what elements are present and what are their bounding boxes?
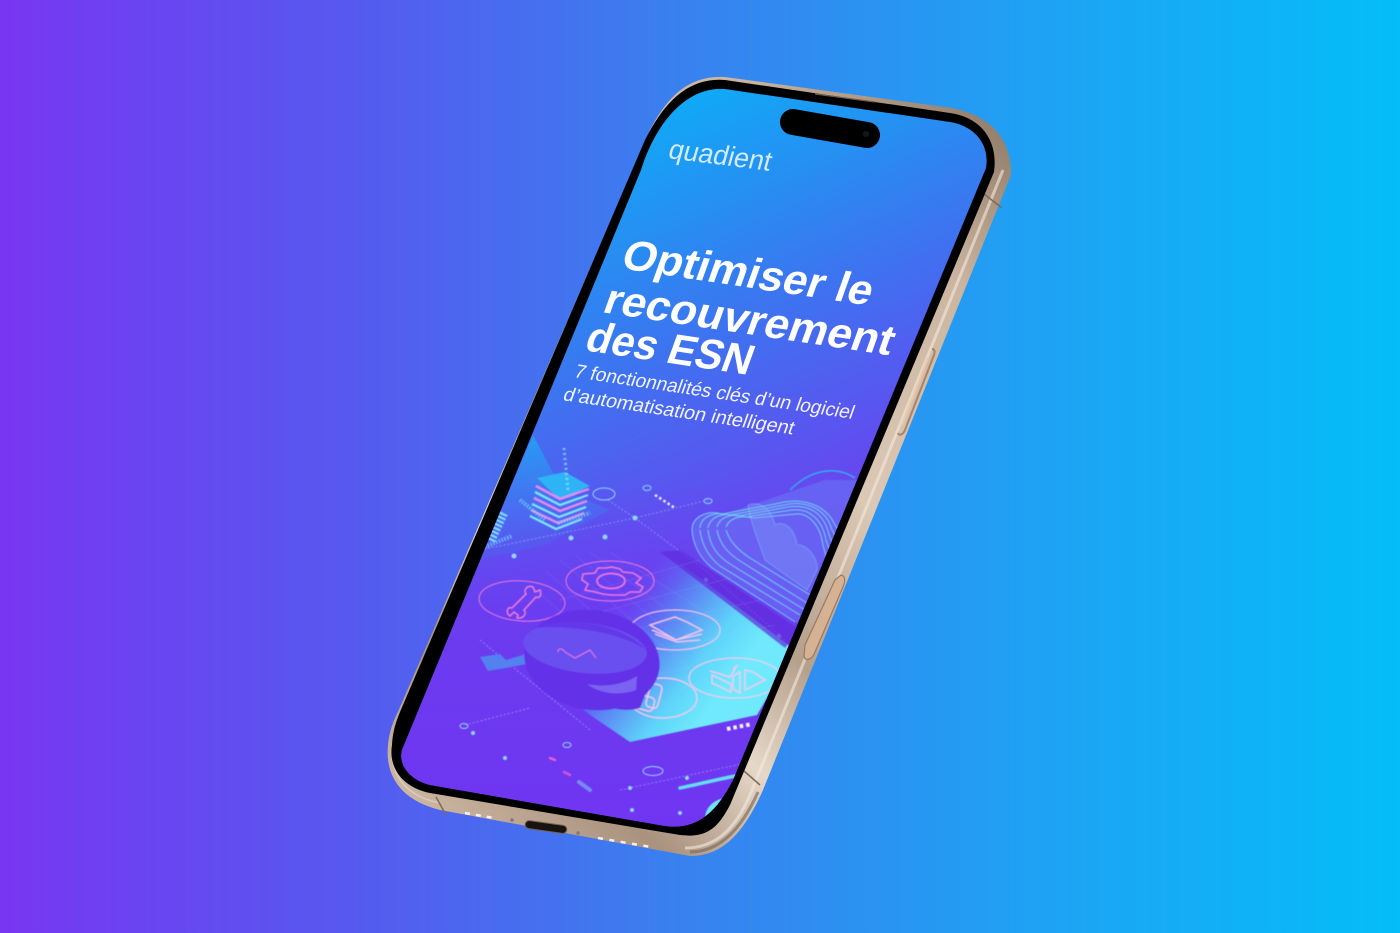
cloud outlines: [692, 471, 860, 640]
icon: chain link circle: [629, 678, 697, 718]
grid on panel: [538, 552, 775, 702]
title line 3: des ESN: [580, 313, 761, 384]
magnifier ring: [524, 610, 660, 711]
magnifier lens: [523, 623, 647, 674]
lens highlight band: [587, 676, 637, 693]
magnifier lower body: [615, 694, 646, 710]
dynamic island: [793, 122, 867, 135]
server stacks: [482, 448, 590, 548]
camera dot: [863, 131, 869, 137]
logo: quadient: quadient: [665, 134, 776, 177]
charging port: [525, 820, 567, 834]
isometric illustration: [460, 435, 860, 830]
subtitle line 2: d’automatisation intelligent: [560, 385, 798, 439]
icon: gear circle: [566, 561, 654, 601]
dotted row: [655, 495, 675, 508]
title line 2: recouvrement: [598, 275, 902, 365]
icon: wrench circle: [478, 578, 566, 624]
black bezel: [391, 80, 995, 836]
screen: [401, 88, 987, 827]
earpiece slit: [815, 94, 875, 102]
phone body: [380, 70, 1020, 856]
light beams: [478, 435, 610, 560]
metal frame: [388, 77, 1011, 856]
icon: bar chart circle: [689, 658, 781, 698]
magnifier handle: [480, 654, 527, 671]
frame highlights and antenna bands: [392, 170, 1003, 852]
cyan panel: [582, 558, 789, 742]
icon: stacked layers circle: [630, 610, 720, 650]
side power button: [804, 575, 845, 659]
lens inner shadow: [535, 622, 646, 650]
volume button: [898, 349, 935, 435]
title: [587, 242, 896, 374]
dots row on panel corner: [727, 724, 752, 729]
lower bar marks: [548, 756, 736, 817]
connector lines and nodes: [465, 500, 785, 790]
dark panel edge: [660, 550, 800, 648]
magnifier: [480, 610, 660, 711]
speaker holes right: [598, 838, 651, 847]
screen background: [401, 88, 987, 827]
subtitle: [564, 364, 856, 434]
screws: [510, 818, 580, 835]
lower screen shade: [401, 504, 846, 827]
title line 1: Optimiser le: [616, 231, 881, 315]
speaker holes left: [465, 813, 494, 818]
subtitle line 1: 7 fonctionnalités clés d’un logiciel: [571, 362, 858, 424]
